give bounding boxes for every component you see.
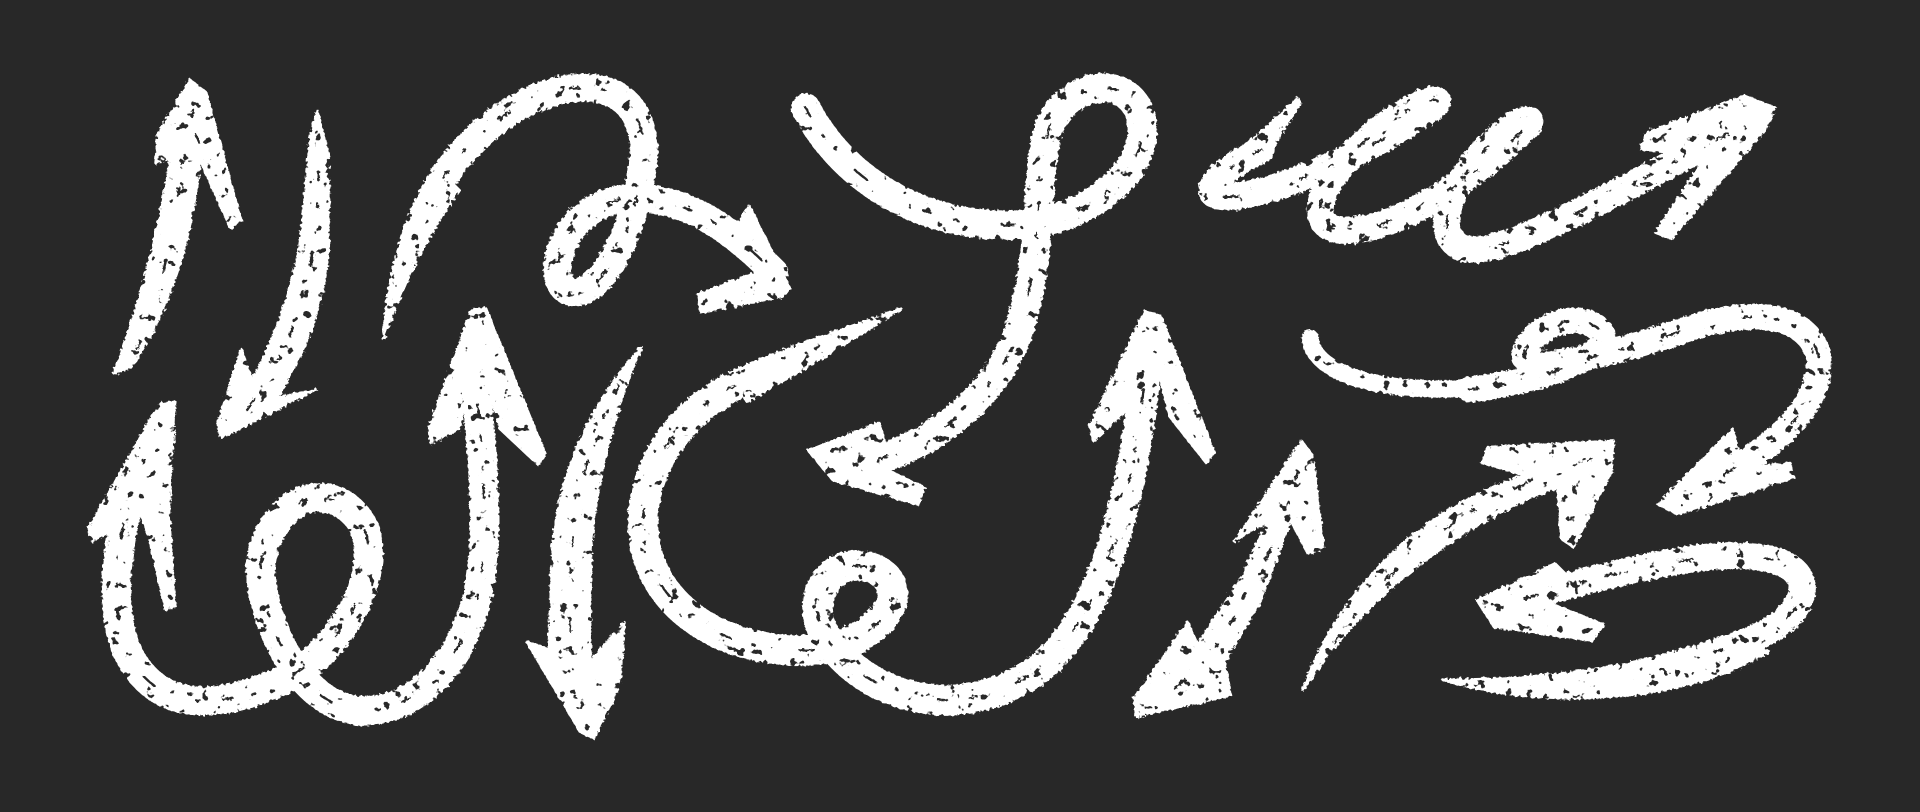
arrow: oval looping arrow bottom right <box>1442 556 1802 698</box>
arrow: double-headed diagonal arrow <box>1134 441 1324 716</box>
arrow: long down arrow centre <box>527 347 642 738</box>
arrow: double-headed looped arrow bottom left <box>88 309 545 711</box>
arrow: arc up right <box>1303 441 1614 691</box>
arrow: curved arrow with small loop at top centre <box>383 88 790 339</box>
arrow: short up arrow top left <box>114 80 241 374</box>
arrow: swoosh with loop on right <box>1310 317 1819 514</box>
arrow: slim down arrow <box>218 110 329 438</box>
arrow: zigzag arrow top right <box>1212 96 1776 250</box>
arrow: long curved arrow with lower loop <box>643 309 1215 700</box>
arrow: looped S arrow at top centre <box>806 88 1142 505</box>
